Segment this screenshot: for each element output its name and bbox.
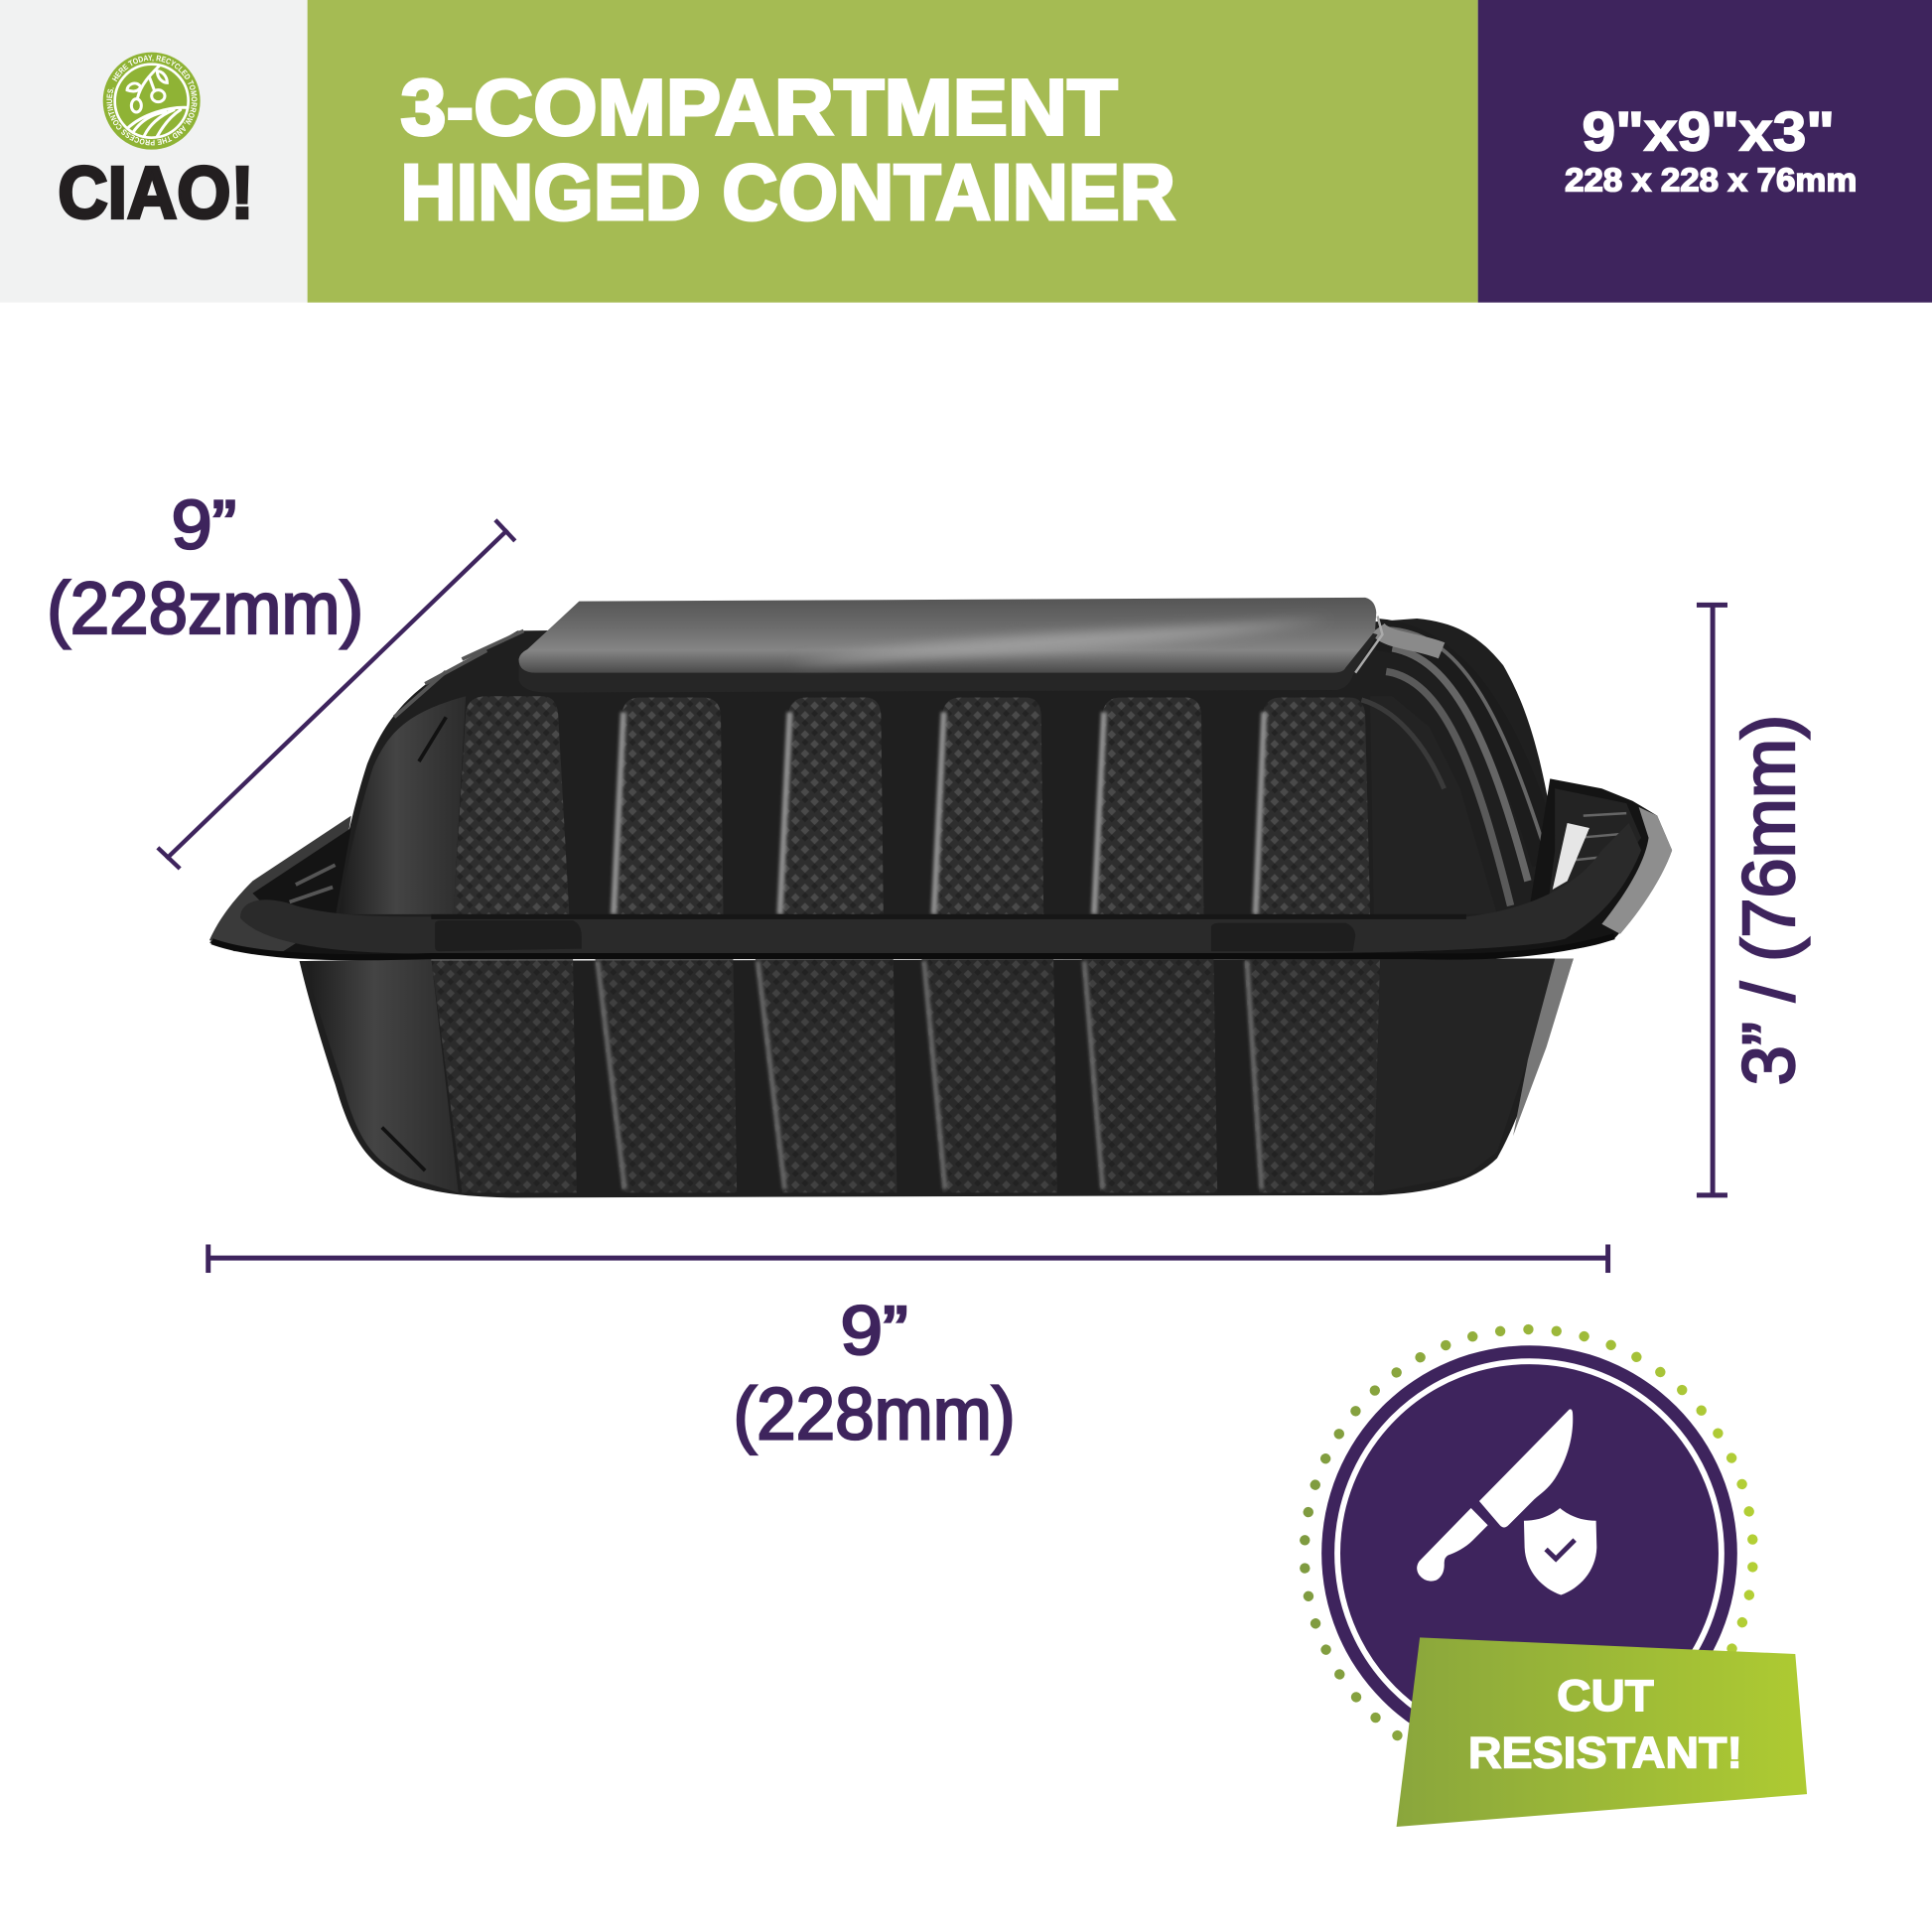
header band — [0, 0, 1932, 303]
badge: cut resistant — [1305, 1329, 1807, 1827]
rim band — [240, 823, 1641, 954]
dimension arrow: height — [1697, 605, 1727, 1195]
icon: shield with check — [1524, 1508, 1596, 1595]
size in inches and millimetres — [1565, 99, 1857, 199]
dimension label: width: (228mm) — [733, 1373, 1016, 1455]
dimension arrow: depth — [158, 520, 515, 869]
upper textured panels — [454, 696, 1370, 914]
lid raised centre panel — [518, 598, 1382, 692]
green ribbon — [1397, 1637, 1807, 1827]
dimension label: depth — [47, 485, 363, 649]
panel: logo background — [0, 0, 308, 303]
ribbon text: RESISTANT! — [1468, 1729, 1742, 1778]
dimension arrow: width — [208, 1244, 1608, 1273]
lid right ribs — [1361, 628, 1548, 905]
icon: knife — [1417, 1409, 1573, 1582]
panel: title background — [308, 0, 1478, 303]
ribbon text: CUT — [1557, 1672, 1654, 1721]
size in inches and millimetres: 228 x 228 x 76mm — [1565, 162, 1857, 199]
panel: size background — [1478, 0, 1932, 303]
ribbon text — [1468, 1672, 1742, 1778]
container base — [300, 959, 1574, 1197]
size in inches and millimetres: 9"x9"x3" — [1583, 99, 1835, 162]
dimension label: width — [733, 1292, 1016, 1455]
dotted ring — [1305, 1329, 1753, 1778]
dimension label: height: 3” / (76mm) — [1727, 715, 1810, 1085]
title — [400, 63, 1175, 236]
right latch — [1211, 923, 1355, 951]
logo wordmark: CIAO! — [58, 152, 254, 234]
left rim flange — [209, 816, 351, 951]
product photo: black hinged container — [209, 598, 1672, 1197]
dimension label: depth: (228zmm) — [47, 567, 363, 649]
lower textured panels — [431, 959, 1380, 1192]
dimension label: depth: 9” — [172, 485, 236, 563]
upper panel highlights — [614, 712, 1264, 914]
left latch — [435, 920, 582, 951]
lower panel highlights — [598, 961, 1262, 1189]
dimension label: width: 9” — [840, 1292, 908, 1369]
lid left ribs — [394, 630, 523, 761]
title: HINGED CONTAINER — [400, 148, 1175, 236]
purple disc — [1321, 1345, 1737, 1761]
white inner ring — [1337, 1361, 1722, 1745]
icon: round recycling seal: HERE TODAY, RECYCLED TOMORROW, AND THE PROCESS CONTINUES. — [106, 55, 197, 145]
right rim flange — [209, 778, 1672, 957]
container lid dome — [333, 619, 1555, 918]
title: 3-COMPARTMENT — [400, 63, 1118, 151]
